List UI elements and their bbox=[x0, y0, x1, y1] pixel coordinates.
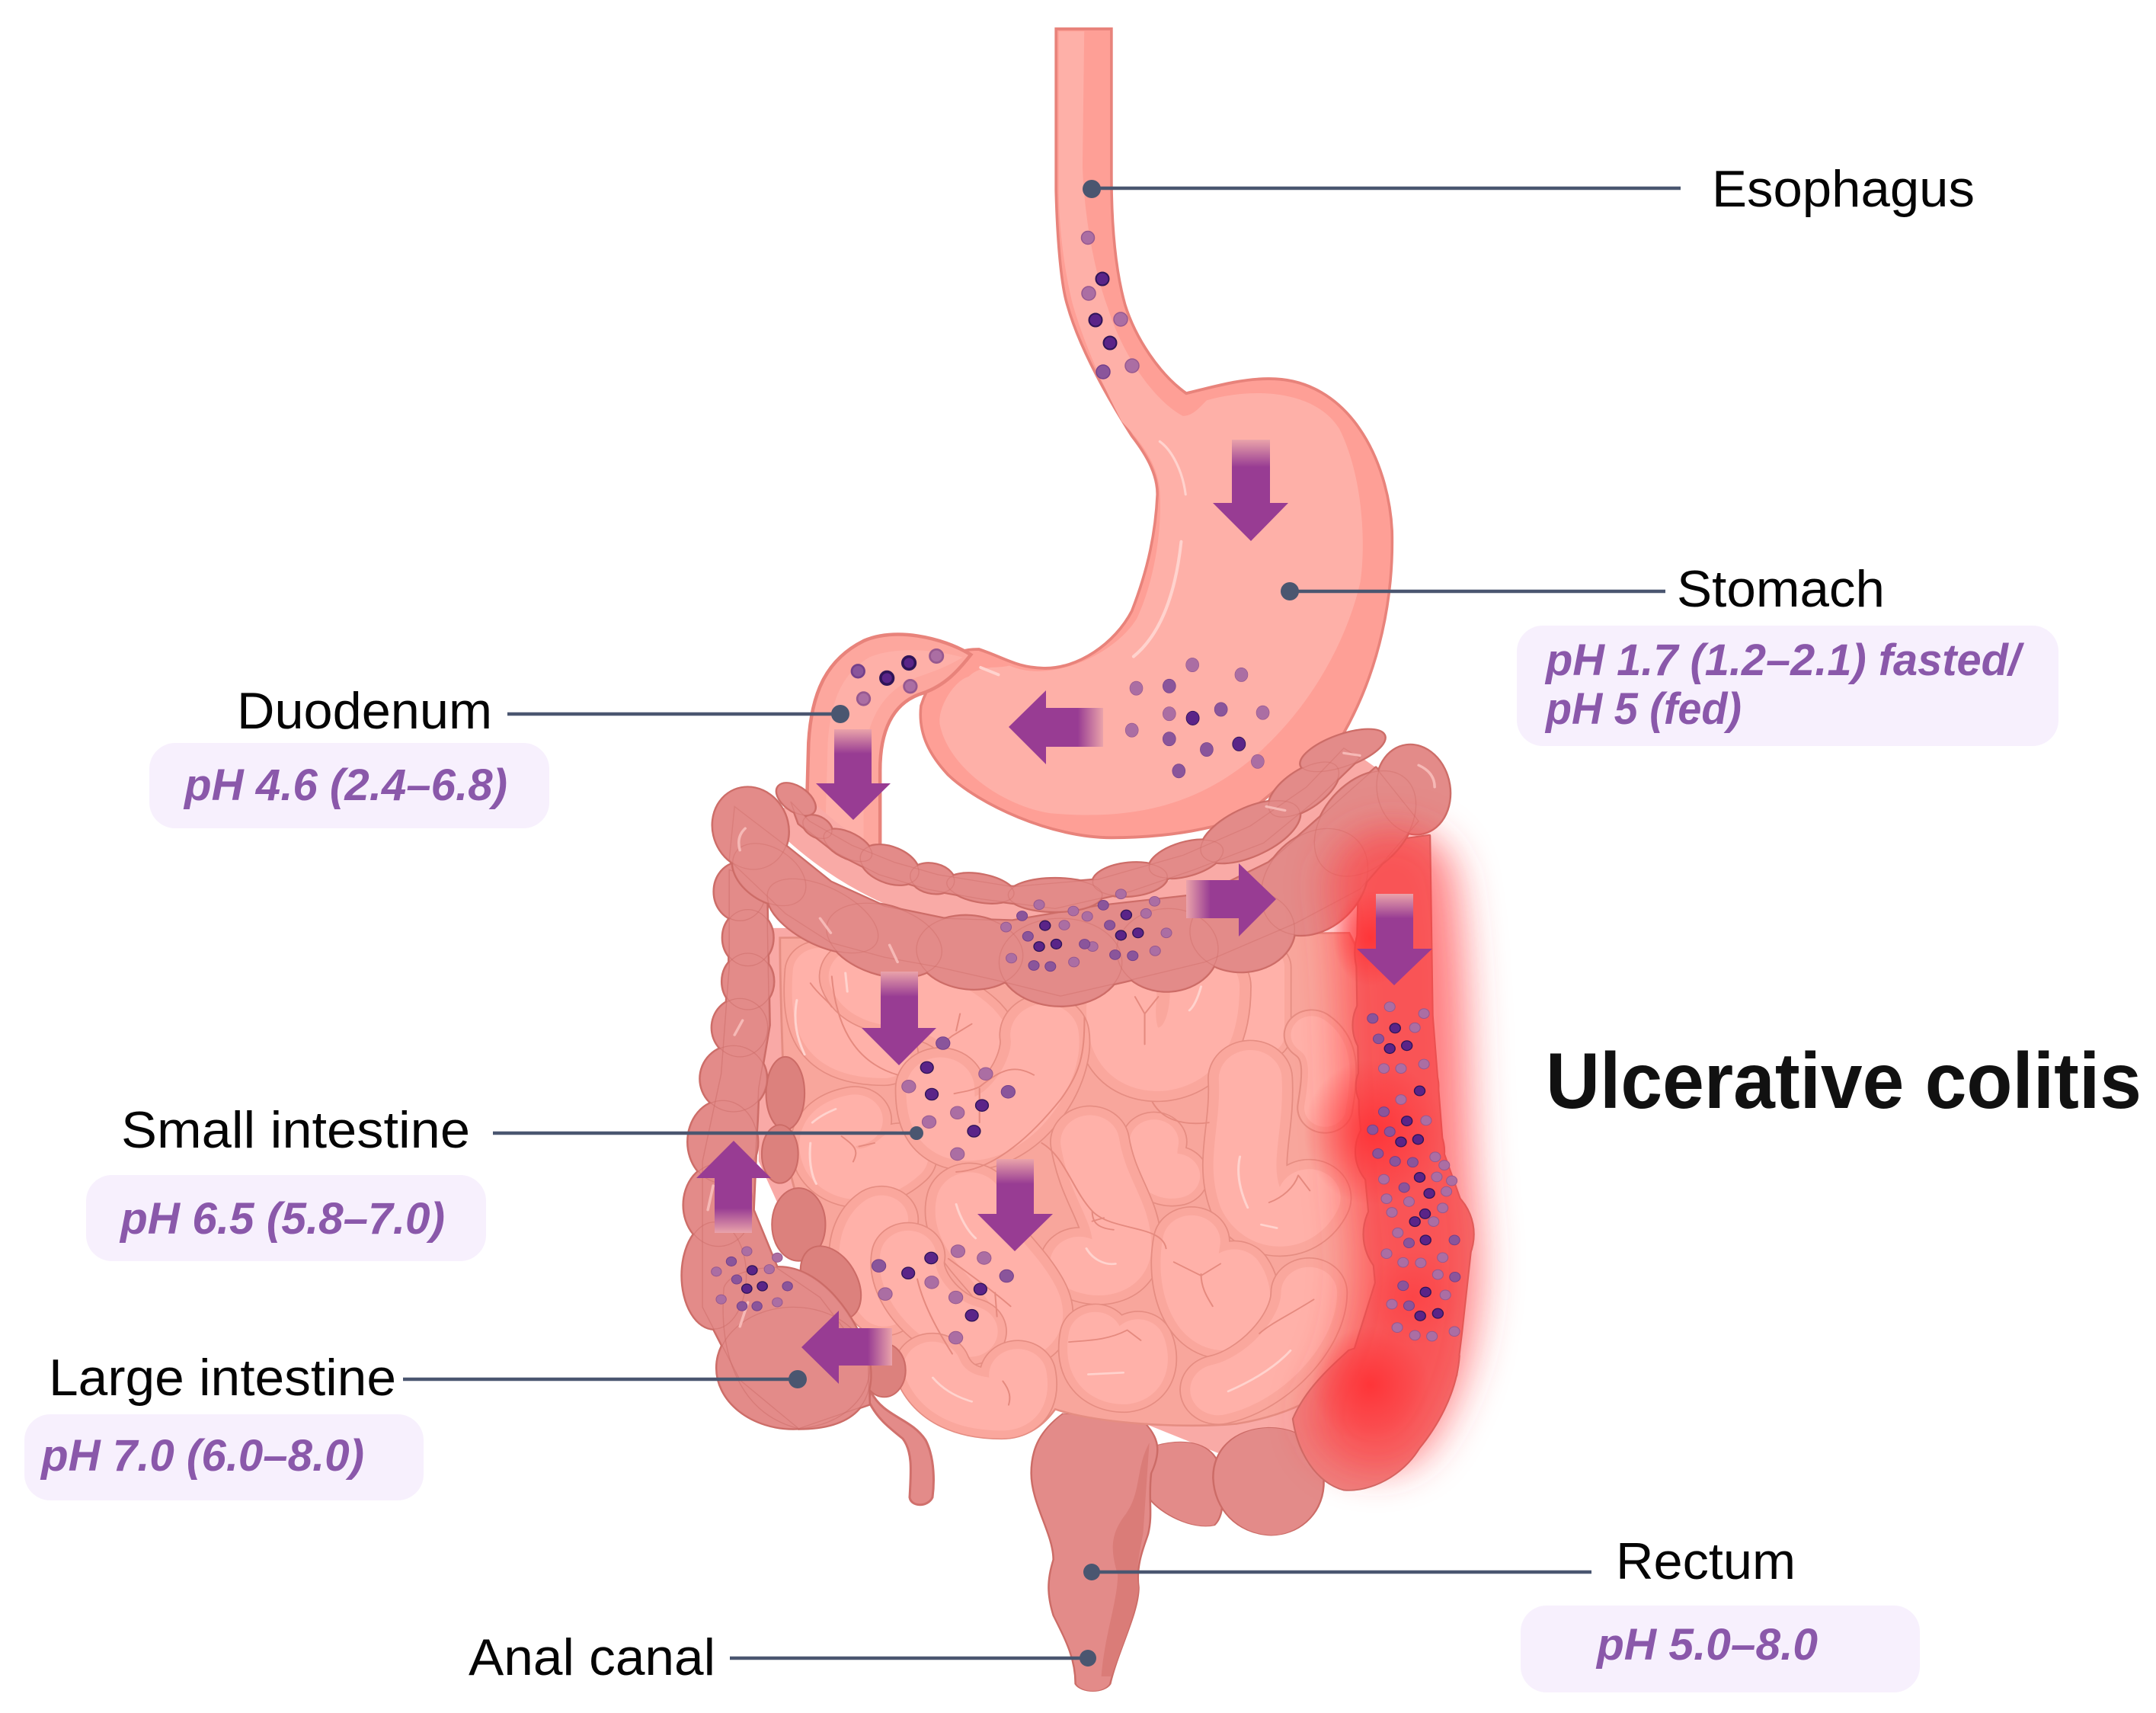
arrow: stomach down bbox=[1213, 440, 1288, 541]
duodenum bbox=[806, 635, 971, 860]
label: small intestine: Small intestine bbox=[121, 1101, 470, 1159]
label: anal canal bbox=[469, 1628, 1096, 1686]
label: large intestine: pH 7.0 (6.0–8.0) bbox=[40, 1431, 364, 1481]
large intestine: colon bbox=[682, 721, 1473, 1490]
arrow: duodenum down bbox=[816, 729, 891, 820]
mesentery between colon bands bbox=[785, 767, 1376, 918]
label: stomach: Stomach bbox=[1677, 560, 1885, 618]
arrow: ascending colon up bbox=[696, 1141, 771, 1233]
particles: stomach bbox=[1125, 658, 1269, 778]
arrow: small intestine to caecum bbox=[801, 1311, 892, 1384]
arrow: small intestine upper bbox=[862, 972, 936, 1065]
esophagus and stomach bbox=[920, 29, 1392, 837]
label: rectum: pH 5.0–8.0 bbox=[1595, 1620, 1818, 1670]
label: esophagus: Esophagus bbox=[1712, 160, 1975, 218]
label: duodenum bbox=[149, 682, 849, 828]
small intestine fold lines bbox=[811, 976, 1313, 1405]
label: small intestine: pH 6.5 (5.8–7.0) bbox=[119, 1194, 445, 1244]
arrow: stomach to pylorus bbox=[1009, 690, 1103, 764]
label: rectum: Rectum bbox=[1616, 1532, 1796, 1590]
label: duodenum: Duodenum bbox=[237, 682, 492, 740]
appendix bbox=[868, 1391, 933, 1505]
label: stomach: pH 5 (fed) bbox=[1544, 684, 1742, 734]
upper transverse band bbox=[770, 721, 1391, 911]
label: large intestine: Large intestine bbox=[49, 1349, 396, 1407]
label: large intestine bbox=[24, 1349, 807, 1500]
inner colon lobes beside small intestine bbox=[762, 1057, 906, 1397]
highlights on colon bbox=[708, 753, 1435, 1327]
label: stomach bbox=[1281, 560, 2058, 746]
particles: esophagus bbox=[1082, 232, 1139, 379]
arrow: small intestine lower bbox=[977, 1159, 1053, 1251]
label: esophagus bbox=[1083, 160, 1975, 218]
arrow: transverse colon right bbox=[1186, 863, 1276, 937]
particles: duodenum bbox=[852, 649, 943, 705]
label: anal canal: Anal canal bbox=[469, 1628, 715, 1686]
lower transverse band bbox=[705, 741, 1456, 1006]
rectum, anal canal and sigmoid colon bbox=[1032, 1397, 1324, 1691]
label: small intestine bbox=[86, 1101, 923, 1261]
inflammation glow on descending colon bbox=[1304, 884, 1461, 1443]
small intestine bbox=[759, 928, 1385, 1439]
arrow: descending colon down bbox=[1357, 894, 1432, 985]
label: duodenum: pH 4.6 (2.4–6.8) bbox=[183, 760, 507, 810]
label: stomach: pH 1.7 (1.2–2.1) fasted/ bbox=[1544, 636, 2025, 685]
ascending colon and caecum bbox=[682, 863, 870, 1429]
small intestine highlights bbox=[795, 973, 1291, 1401]
descending colon bbox=[1294, 836, 1473, 1490]
particles: transverse, small intestine, ascending and descending colon bbox=[712, 889, 1460, 1344]
label: rectum bbox=[1083, 1532, 1920, 1692]
